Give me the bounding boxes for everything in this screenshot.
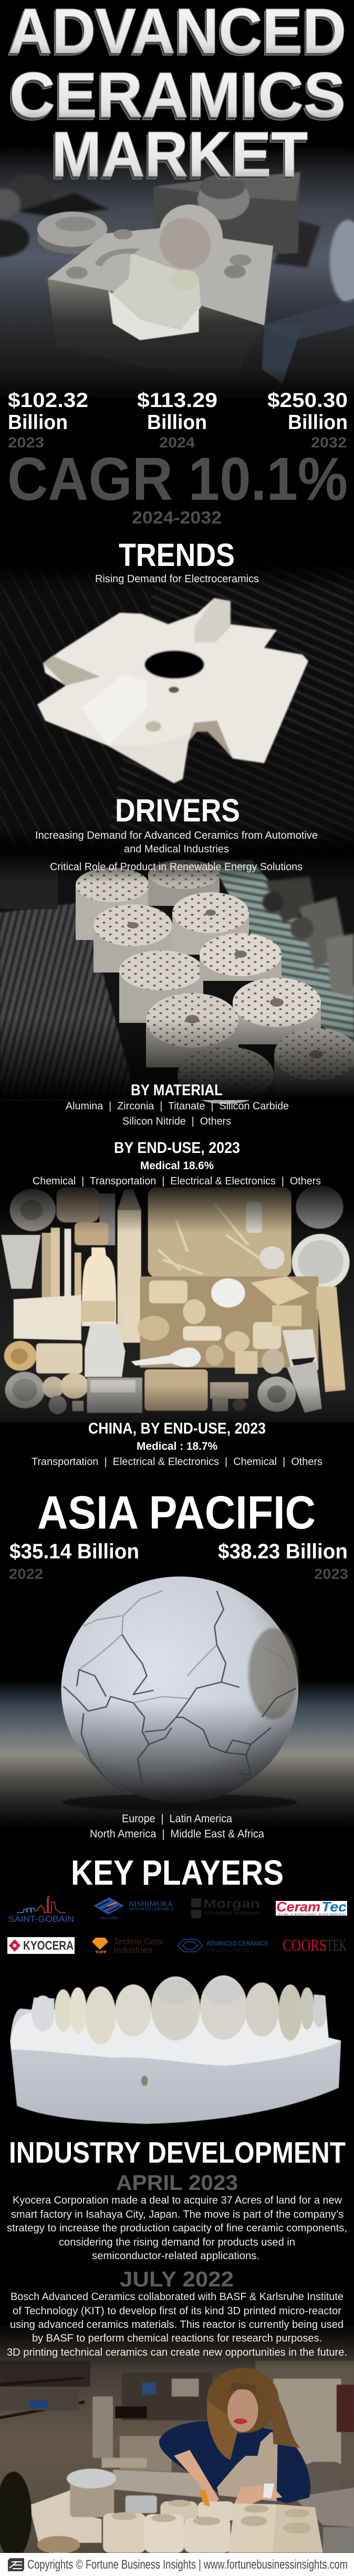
logo: Nishimura: NISHIMURA bbox=[129, 1900, 173, 1908]
title: MARKET bbox=[50, 121, 306, 193]
lower rows bbox=[4, 1341, 37, 1371]
stat: 2032 bbox=[267, 389, 348, 451]
drivers heading and text: and Medical Industries bbox=[124, 843, 229, 855]
logo: Techno Cera Industries: TUFF bbox=[95, 1951, 107, 1954]
by end-use segment: Medical 18.6% bbox=[140, 1160, 214, 1172]
trends background image: ceramic gear on ribbed mat bbox=[0, 564, 354, 852]
image: assorted ceramic objects bbox=[0, 1183, 354, 1422]
logo: CoorsTek: COORS bbox=[283, 1936, 327, 1954]
logo: Techno Cera Industries bbox=[92, 1937, 163, 1955]
by end-use segment bbox=[33, 1139, 321, 1187]
trends heading and text: TRENDS bbox=[119, 537, 235, 573]
development: July 2022 bbox=[7, 2267, 347, 2358]
stat: 2024: $113.29 bbox=[137, 389, 217, 412]
asia pacific heading and values: ASIA PACIFIC bbox=[37, 1486, 316, 1538]
logo: CeramTec: THE CERAMIC EXPERTS bbox=[277, 1913, 346, 1916]
title bbox=[7, 0, 346, 193]
title: CERAMICS bbox=[9, 59, 346, 131]
mechanical parts right bbox=[263, 876, 354, 997]
footer bbox=[0, 2553, 354, 2576]
stat: 2023: Billion bbox=[8, 411, 68, 434]
key players heading: KEY PLAYERS bbox=[71, 1853, 284, 1893]
asia pacific heading and values: 2023 bbox=[314, 1566, 348, 1582]
by material segment: BY MATERIAL bbox=[131, 1082, 223, 1099]
logo: Kyocera: KYOCERA bbox=[23, 1939, 74, 1953]
logo: Morgan bbox=[191, 1897, 260, 1918]
by material segment: Silicon Nitride | Others bbox=[122, 1116, 231, 1127]
asia pacific heading and values: $35.14 Billion bbox=[9, 1540, 139, 1563]
hero image: ceramic dental mould on a grey table bbox=[0, 145, 354, 398]
plaster moulds on the table bbox=[0, 2468, 354, 2559]
stat: 2032: 2032 bbox=[311, 434, 347, 451]
logo: CeramTec: Tec bbox=[321, 1899, 347, 1915]
by end-use segment: BY END-USE, 2023 bbox=[114, 1139, 240, 1157]
title: CERAMICS bbox=[8, 62, 344, 133]
logo: Morgan: Morgan bbox=[203, 1897, 260, 1910]
logo: Morgan: Advanced Materials bbox=[204, 1910, 260, 1916]
logo: Techno Cera Industries: Industries bbox=[113, 1945, 152, 1955]
other regions bbox=[90, 1813, 264, 1840]
by material segment: Alumina | Zirconia | Titanate | Silicon Carbide bbox=[66, 1100, 289, 1112]
asia pacific heading and values bbox=[9, 1486, 348, 1582]
development: April 2023: semiconductor-related applications. bbox=[92, 2250, 259, 2262]
stat: 2024 bbox=[137, 389, 217, 451]
drivers heading and text: DRIVERS bbox=[115, 793, 240, 828]
stat: 2032: $250.30 bbox=[267, 389, 348, 412]
development: April 2023 bbox=[7, 2171, 347, 2262]
china by end-use: Transportation | Electrical & Electronics | Chemical | Others bbox=[32, 1456, 322, 1468]
stat: 2032: Billion bbox=[288, 411, 348, 434]
logo: Nishimura: since 1918 bbox=[100, 1916, 118, 1920]
logo: Advanced Ceramics Manufacturing: ADVANCED CERAMICS bbox=[206, 1940, 268, 1947]
china by end-use: CHINA, BY END-USE, 2023 bbox=[88, 1420, 266, 1437]
logo: CeramTec: Ceram bbox=[276, 1899, 320, 1915]
development: July 2022: using advanced ceramics materials. This reactor is currently being used bbox=[10, 2319, 343, 2331]
image: ceramic dental crowns on plaster model bbox=[10, 1975, 341, 2124]
asia pacific heading and values: 2022 bbox=[9, 1566, 43, 1582]
logo: Advanced Ceramics Manufacturing bbox=[178, 1939, 268, 1953]
development: July 2022: of Technology (KIT) to develop first of its kind 3D printed micro-reactor bbox=[13, 2305, 341, 2317]
china by end-use bbox=[32, 1420, 322, 1468]
development: April 2023: smart factory in Isahaya City, Japan. The move is part of the company’s bbox=[11, 2209, 343, 2220]
development: April 2023: APRIL 2023 bbox=[116, 2171, 238, 2195]
ribbed dark parts left bbox=[0, 902, 137, 1100]
stat: 2023: $102.32 bbox=[8, 389, 88, 412]
logo: CeramTec bbox=[276, 1899, 347, 1916]
logo: Saint-Gobain: SAINT-GOBAIN bbox=[8, 1914, 74, 1924]
china by end-use: Medical : 18.7% bbox=[137, 1440, 217, 1452]
other regions: North America | Middle East & Africa bbox=[90, 1828, 264, 1840]
development: July 2022: Bosch Advanced Ceramics collaborated with BASF & Karlsruhe Institute bbox=[11, 2291, 343, 2303]
ceramic gear bbox=[37, 598, 308, 783]
perforated discs bbox=[76, 860, 354, 1104]
stat: 2023: 2023 bbox=[8, 434, 44, 451]
logo: Nishimura: ADVANCED CERAMICS bbox=[129, 1907, 173, 1911]
development: July 2022: 3D printing technical ceramics can create new opportunities in the future. bbox=[7, 2347, 347, 2358]
development: April 2023: strategy to increase the production capacity of fine ceramic components, bbox=[7, 2222, 347, 2234]
cracked sphere image bbox=[0, 1574, 354, 1825]
stat: 2024: Billion bbox=[147, 411, 207, 434]
logo: Kyocera bbox=[7, 1937, 75, 1954]
title: MARKET bbox=[51, 119, 308, 190]
logo: Saint-Gobain bbox=[8, 1896, 74, 1924]
drivers heading and text: Critical Role of Product in Renewable Energy Solutions bbox=[50, 861, 303, 873]
image: ceramicist working with plaster moulds bbox=[0, 2325, 354, 2559]
drivers heading and text: Increasing Demand for Advanced Ceramics from Automotive bbox=[35, 830, 318, 841]
trends heading and text bbox=[95, 537, 259, 585]
development: April 2023: considering the rising demand for products used in bbox=[59, 2237, 295, 2248]
toothed belt bbox=[210, 860, 354, 1044]
development: April 2023: Kyocera Corporation made a deal to acquire 37 Acres of land for a new bbox=[13, 2195, 342, 2206]
central jumble bbox=[140, 1276, 318, 1367]
stat: 2024: 2024 bbox=[159, 434, 195, 451]
woman bbox=[159, 2368, 310, 2508]
by material segment bbox=[66, 1082, 289, 1127]
by end-use segment: Chemical | Transportation | Electrical & Electronics | Others bbox=[33, 1175, 321, 1187]
development: July 2022: JULY 2022 bbox=[120, 2267, 234, 2291]
CAGR: 2024-2032 bbox=[132, 508, 222, 527]
ceramic discs image bbox=[0, 851, 354, 1104]
other regions: Europe | Latin America bbox=[122, 1813, 232, 1825]
drivers heading and text bbox=[35, 793, 318, 873]
market size stats bbox=[8, 389, 348, 451]
logo: Nishimura bbox=[93, 1897, 173, 1920]
logo: Advanced Ceramics Manufacturing: MANUFACTURING bbox=[206, 1947, 252, 1953]
logo: Techno Cera Industries: Techno Cera bbox=[113, 1937, 163, 1947]
icon: Fortune Business Insights logo bbox=[8, 2558, 24, 2571]
asia pacific heading and values: $38.23 Billion bbox=[218, 1540, 348, 1563]
stat: 2023 bbox=[8, 389, 88, 451]
development: July 2022: by BASF to perform chemical reactions for research purposes. bbox=[32, 2333, 322, 2344]
trends heading and text: Rising Demand for Electroceramics bbox=[95, 573, 259, 585]
